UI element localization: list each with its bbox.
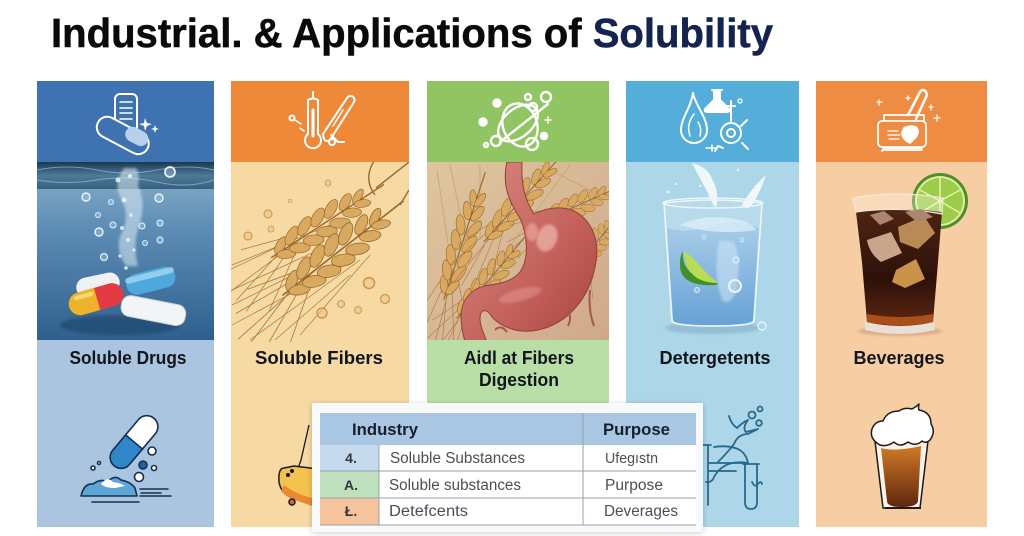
table row 1: 4.: [345, 450, 357, 466]
table row 3: Deverages: [604, 503, 678, 520]
table row 2: A.: [344, 477, 358, 493]
table row 1: [320, 445, 658, 471]
table row 2: [320, 471, 663, 498]
icon: capsule dissolving: [81, 411, 171, 502]
panel: soluble drugs: [37, 81, 214, 527]
label: soluble fibers: Soluble Fibers: [255, 348, 383, 368]
icon: thermometer and test tube: [290, 92, 355, 148]
panel header: beverages: [816, 81, 987, 162]
pill: white tablet: [119, 294, 187, 327]
table header row: Purpose: [603, 420, 670, 439]
table row 3: Ł.: [345, 503, 357, 519]
pill: blue capsule: [125, 266, 176, 295]
image: pills dissolving in water: [37, 162, 214, 340]
panel header: digestion: [427, 81, 609, 162]
label: detergents: Detergetents: [660, 348, 770, 368]
table header row: [320, 413, 696, 445]
icon: foamy beer glass: [871, 404, 933, 508]
label: beverages: Beverages: [854, 348, 944, 368]
panel: soluble fibers: [231, 81, 409, 527]
icon: capsule and document: [93, 94, 159, 158]
table row 1: Soluble Substances: [390, 450, 525, 467]
table header row: Industry: [352, 420, 419, 439]
table row 1: Ufegıstn: [605, 450, 658, 467]
table: industry and purpose: [312, 403, 703, 532]
icon: mortar and pestle card: [877, 90, 940, 151]
label: aid at fibers digestion: Digestion: [479, 370, 559, 390]
panel header: detergents: [626, 81, 799, 162]
table row 3: Detefcents: [389, 503, 468, 520]
table row 2: Purpose: [605, 477, 663, 494]
pill: yellow and red capsule: [68, 283, 124, 316]
label: aid at fibers digestion: Aidl at Fibers: [464, 348, 574, 368]
icon: test tubes and splash: [703, 406, 762, 509]
image: stomach and wheat: [427, 162, 609, 340]
image: wheat spikes: [231, 162, 409, 342]
title: Industrial. & Applications of Solubility: [51, 10, 773, 56]
icon: molecule network: [480, 92, 551, 151]
pill: white round: [76, 272, 120, 292]
table row 2: Soluble substances: [389, 477, 521, 494]
table row 3: [320, 498, 678, 525]
panel: aid at fibers digestion: [427, 81, 609, 403]
image: water glass with lime: [663, 163, 766, 334]
panel header: soluble drugs: [37, 81, 214, 162]
image: cola glass with lime: [853, 173, 968, 336]
panel: beverages: [816, 81, 987, 527]
panel header: soluble fibers: [231, 81, 409, 162]
label: soluble drugs: Soluble Drugs: [70, 348, 186, 368]
icon: drop, flask and gear: [681, 90, 748, 151]
icon: yellow capsule character: [279, 425, 318, 507]
panel: detergents: [626, 81, 799, 527]
